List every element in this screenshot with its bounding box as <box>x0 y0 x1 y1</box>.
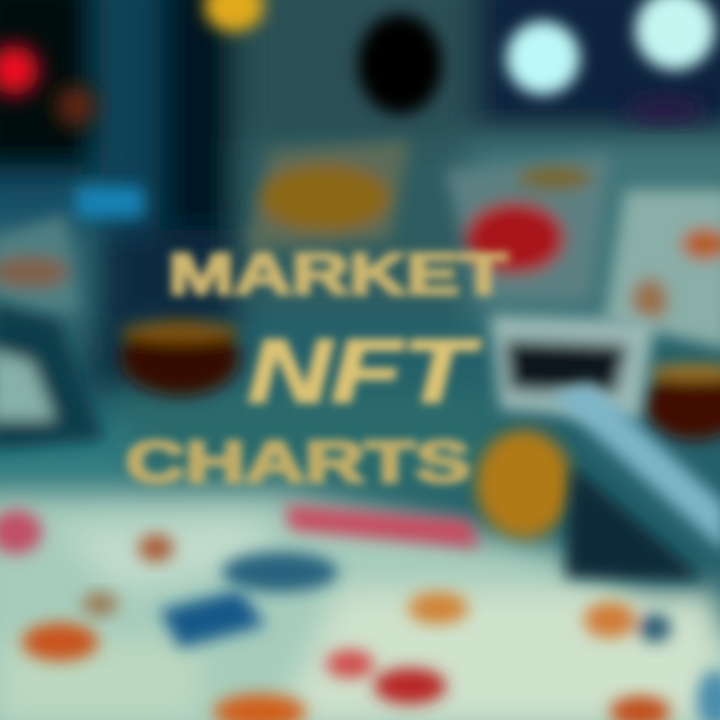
title line: market: MARKET <box>168 242 508 307</box>
chart spot: blue <box>160 590 265 648</box>
tablet: dark screen <box>490 315 655 420</box>
chart spot: red <box>326 650 446 704</box>
cups and dark objects <box>120 315 720 580</box>
card: gold <box>245 140 410 250</box>
icon: blue sign <box>76 186 144 218</box>
icon: cyan light right <box>635 0 715 70</box>
card: red <box>445 155 610 300</box>
title line: charts: CHARTS <box>126 430 470 495</box>
icon: black circle <box>358 14 442 114</box>
charts on table <box>0 505 720 720</box>
card: lower left <box>0 300 105 450</box>
panels: cards on wall <box>0 140 720 450</box>
chart spot: red left <box>0 510 42 554</box>
card: left <box>0 215 80 330</box>
chart spot: pink strip <box>285 505 480 548</box>
title line: NFT: NFT <box>248 322 482 422</box>
chart spot: orange small <box>138 534 174 562</box>
chart spot: orange bottom right <box>610 696 670 720</box>
chart spot: blue corner <box>697 670 720 720</box>
background: pale table <box>0 490 720 720</box>
pale blue slanted paper <box>550 382 720 552</box>
chart spot: brown <box>82 592 118 616</box>
icon: red light <box>0 45 39 95</box>
cup: right coffee <box>645 364 720 440</box>
dark triangular wedge <box>565 465 705 580</box>
cup: left coffee <box>120 320 240 396</box>
title <box>126 242 508 495</box>
gold cup <box>476 430 572 538</box>
chart spot: orange centre <box>408 592 468 624</box>
chart spot: orange bottom <box>214 694 306 720</box>
icon: orange light <box>56 86 96 126</box>
chart spot: orange lower left <box>22 623 98 661</box>
chart spot: dark blue <box>222 552 338 592</box>
icon: yellow light <box>204 0 264 32</box>
card: right <box>605 190 720 350</box>
lights: glowing orbs <box>0 0 715 218</box>
icon: cyan light left <box>506 21 580 95</box>
icon: magenta faint light <box>625 97 705 123</box>
chart spot: orange blue right <box>584 602 671 642</box>
background: dark upper wall <box>0 0 720 490</box>
